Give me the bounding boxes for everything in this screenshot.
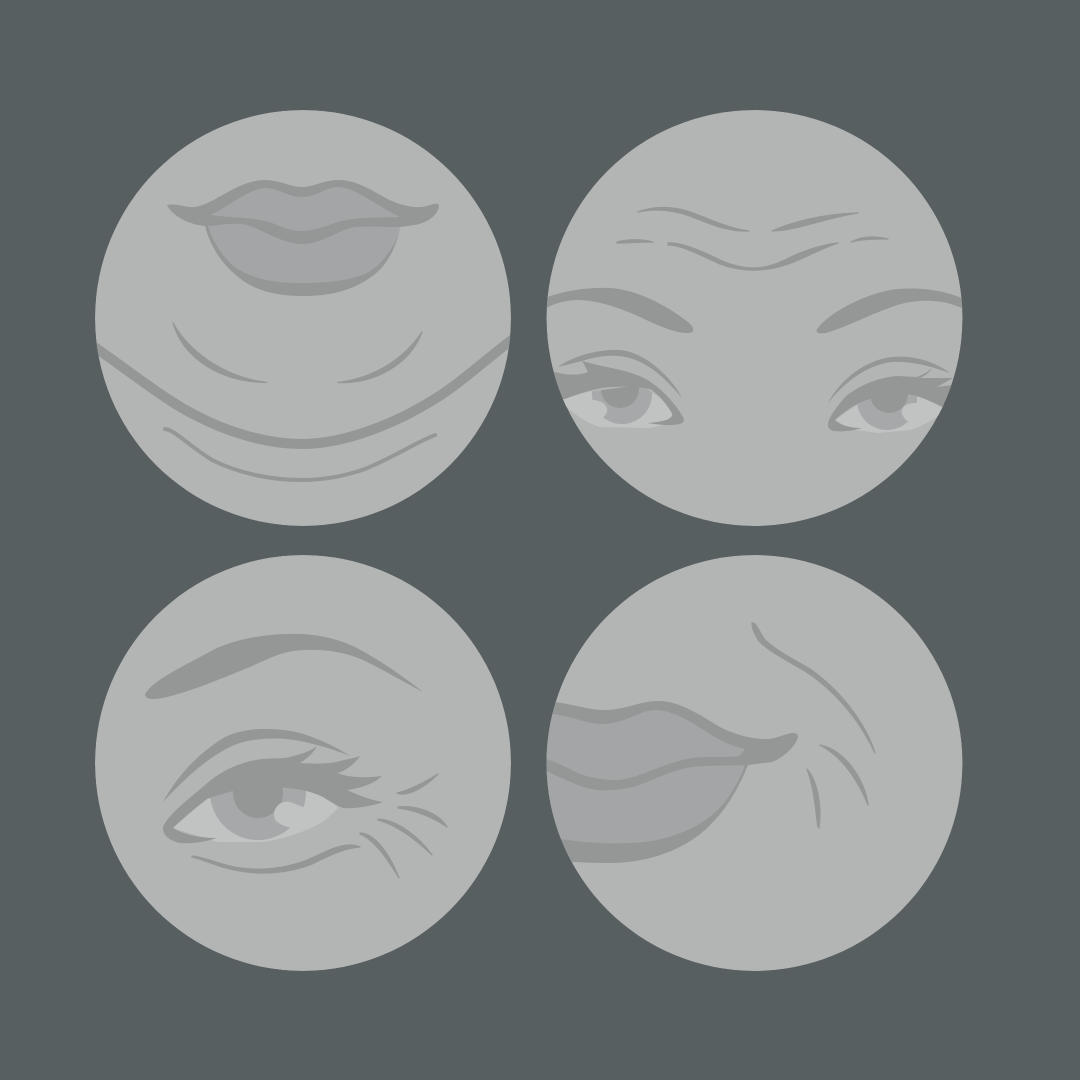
wrinkle: right chin (338, 332, 422, 383)
eyebrow (145, 634, 423, 699)
panel disc (95, 555, 511, 971)
panel disc (546, 555, 962, 971)
left eye crease (558, 350, 682, 398)
left eye (548, 350, 684, 428)
panel disc (95, 110, 511, 526)
illustration: four facial wrinkle circles (95, 110, 962, 971)
wrinkle: lower neck fold (165, 429, 435, 480)
under-eye wrinkle (192, 845, 360, 873)
left eyebrow (545, 288, 693, 333)
right eyebrow (816, 288, 964, 333)
lid and lashes (163, 746, 383, 843)
right eye (828, 357, 960, 433)
panel: eye and crow's feet (95, 555, 511, 971)
right eye crease (828, 357, 950, 403)
right eye lid and lashes (828, 368, 960, 431)
wrinkle: left chin (173, 323, 267, 382)
forehead wrinkles (617, 207, 888, 270)
panel disc (546, 110, 962, 526)
panel: mouth corner wrinkles (540, 555, 962, 971)
wrinkle: main neck fold (93, 339, 513, 444)
panel: forehead and eyes (545, 110, 964, 526)
wrinkle: short line (807, 769, 820, 828)
eyelid crease (163, 729, 350, 802)
panel: lips and chin wrinkles (93, 110, 513, 526)
crow's feet (360, 774, 447, 878)
lips (540, 701, 798, 863)
wrinkle: nasolabial fold (752, 623, 875, 753)
lips (167, 180, 439, 296)
left eye lid and lashes (548, 361, 684, 425)
eye (163, 744, 383, 843)
wrinkle: cheek line (820, 745, 868, 805)
